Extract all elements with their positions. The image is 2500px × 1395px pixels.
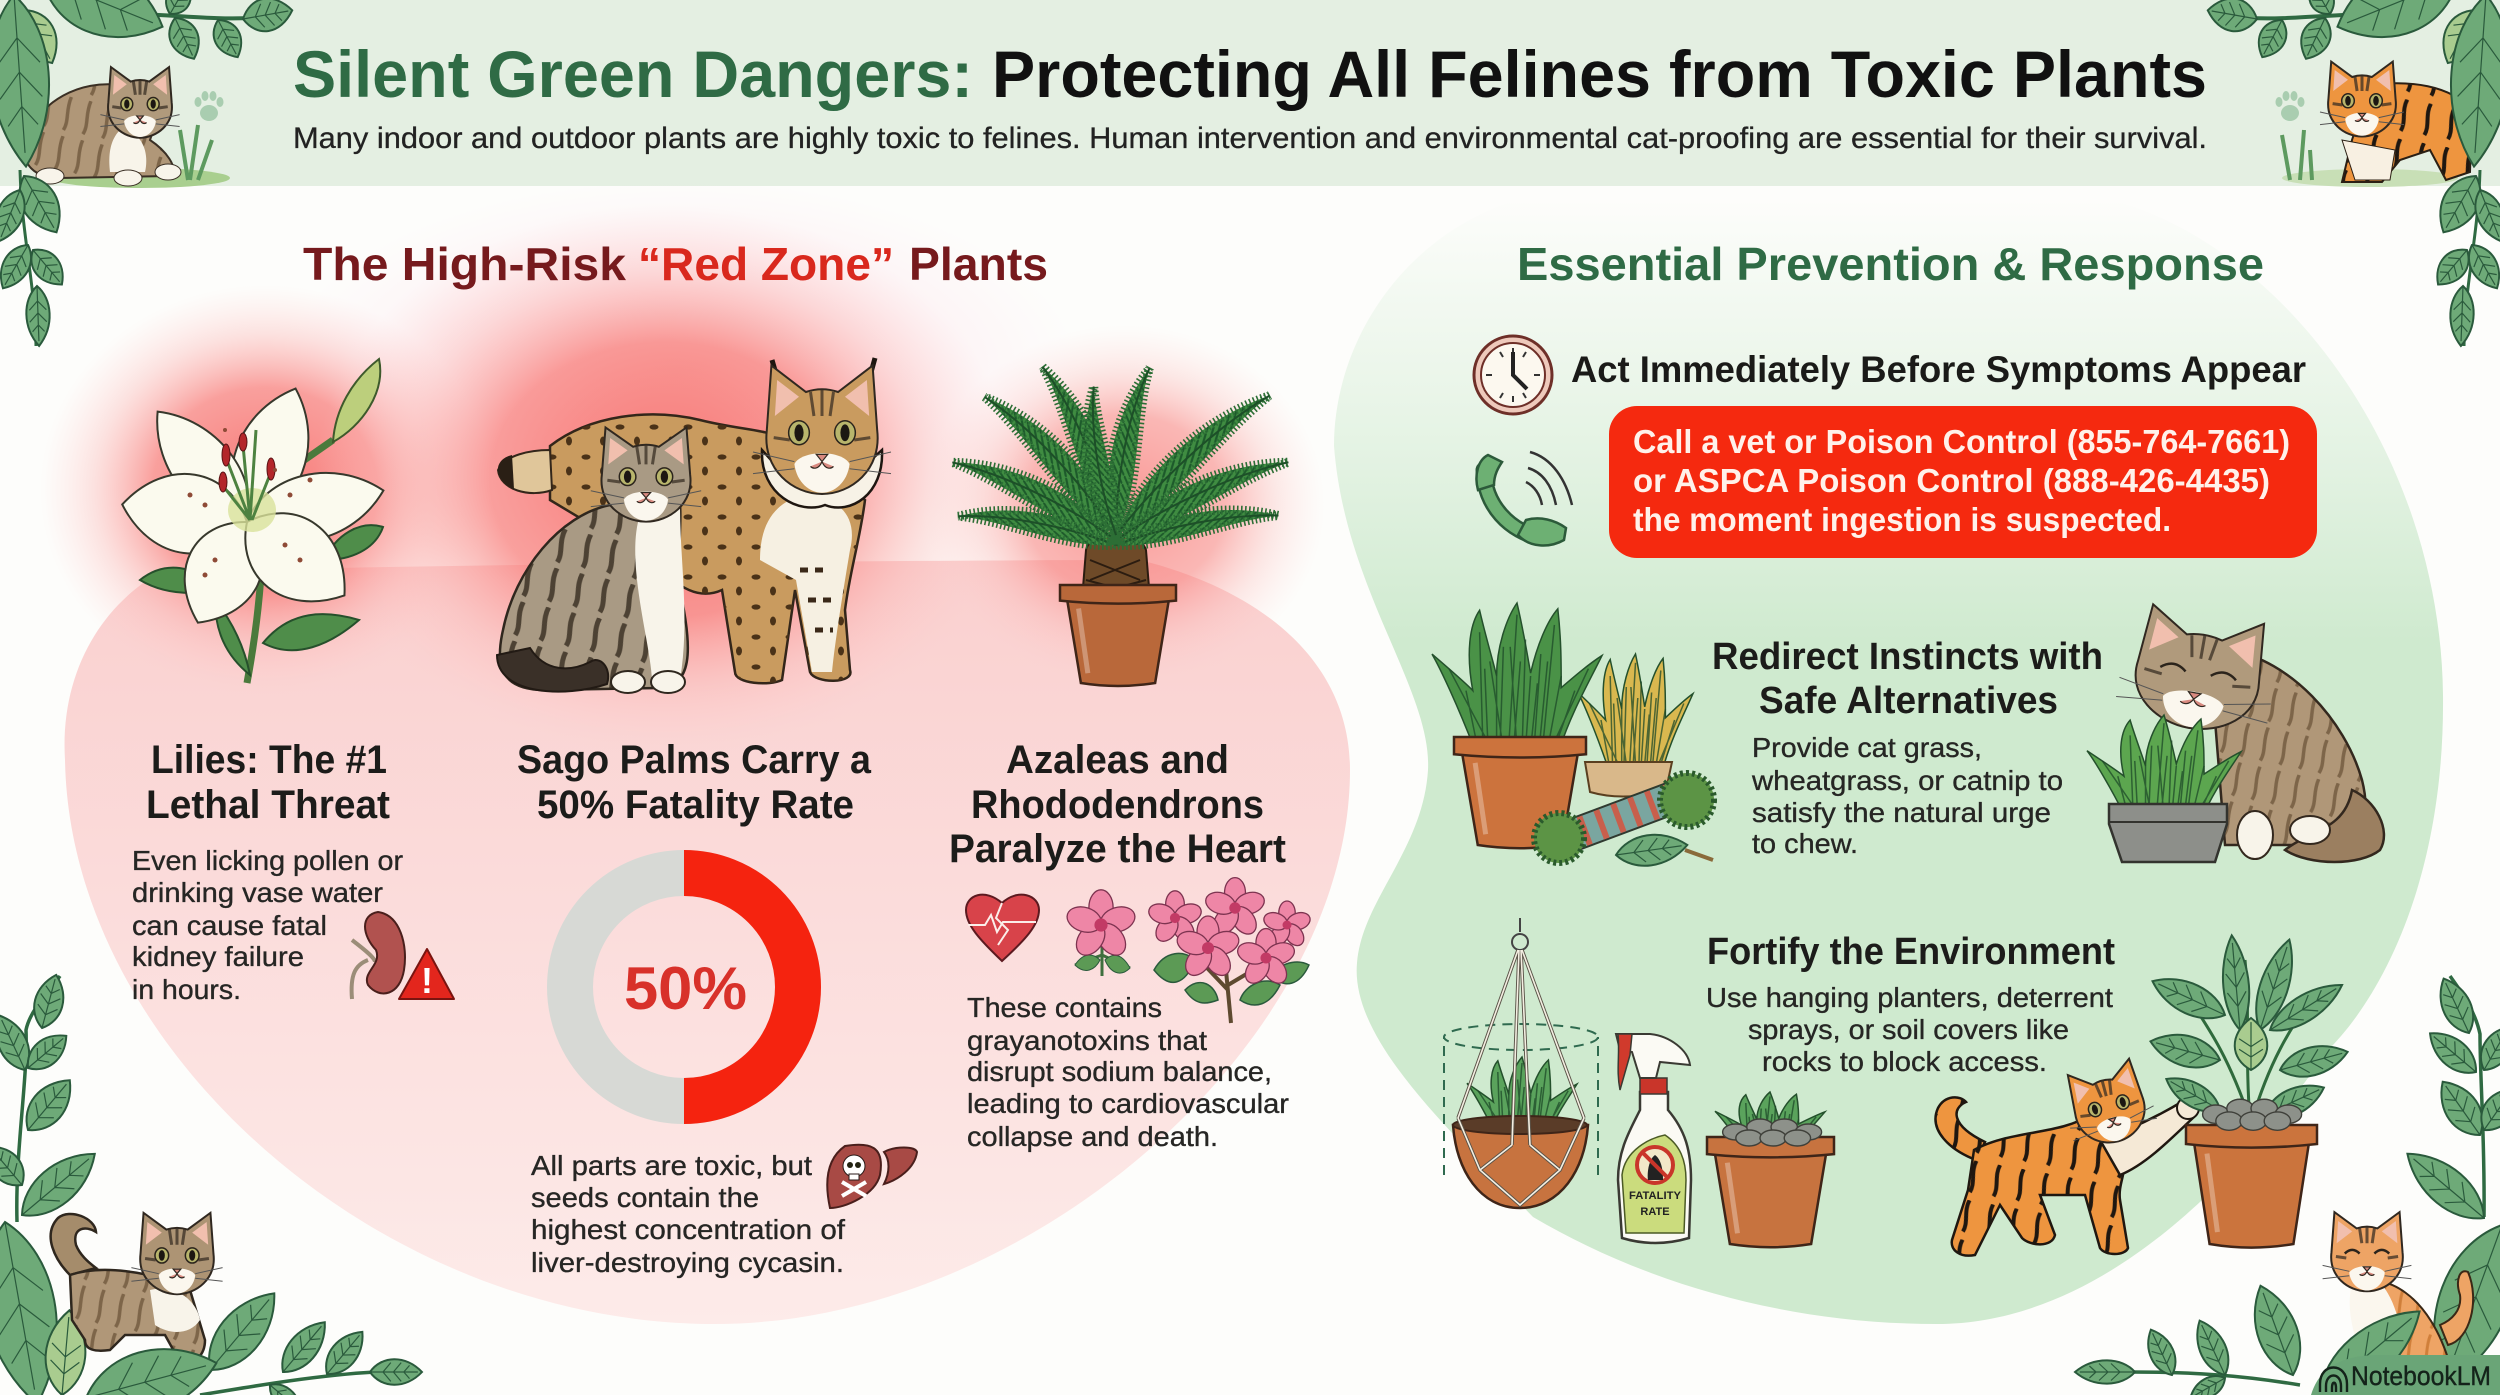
text: redirect: Provide cat grass, [1752, 732, 1982, 763]
icon: warning [399, 949, 454, 1001]
icon: phone [1476, 452, 1572, 545]
foliage: bottom left [0, 971, 422, 1395]
text: sago: liver-destroying cycasin. [531, 1247, 844, 1278]
donut chart: 50 percent [570, 873, 798, 1101]
callout: poison control [1609, 406, 2317, 558]
header band [0, 0, 2500, 186]
foliage: top right [2205, 0, 2500, 346]
heading: red zone: Plants [909, 238, 1048, 290]
callout: poison control: Call a vet or Poison Control (855-764-7661) [1633, 423, 2290, 460]
icon: clock [1474, 336, 1552, 414]
heading: fortify: Fortify the Environment [1707, 931, 2115, 973]
text: lilies: drinking vase water [132, 877, 383, 908]
pink blob [65, 560, 1350, 1324]
text: fortify [1706, 982, 2113, 1077]
icon: broken heart [966, 895, 1039, 961]
callout: poison control: the moment ingestion is suspected. [1633, 501, 2171, 538]
text: azaleas: disrupt sodium balance, [967, 1056, 1272, 1087]
card: azaleas [949, 738, 1312, 1152]
callout: poison control: or ASPCA Poison Control (888-426-4435) [1633, 462, 2270, 499]
illustration: bobcat [498, 358, 891, 683]
illustration: kitten bottom left [51, 1213, 224, 1395]
heading: azaleas: Paralyze the Heart [949, 827, 1286, 871]
foliage: bottom right [2075, 973, 2500, 1395]
text: sago: seeds contain the [531, 1182, 759, 1213]
illustration: tabby cat top left [24, 67, 230, 188]
heading: sago: 50% Fatality Rate [537, 783, 854, 827]
heading: lilies: Lethal Threat [146, 783, 390, 827]
illustration: sago palm [948, 360, 1293, 686]
heading: azaleas: Rhododendrons [971, 783, 1264, 827]
text: sago [531, 1150, 845, 1278]
panel: red zone background [40, 180, 1350, 1324]
heading: redirect: Redirect Instincts with [1712, 636, 2103, 678]
text: azaleas: These contains [967, 992, 1162, 1023]
pale glow behind red zone heading [280, 180, 1080, 560]
donut chart: 50 percent: 50% [624, 955, 747, 1022]
icon: azalea flower [1064, 890, 1138, 976]
card: lilies [132, 738, 454, 1005]
subtitle: Many indoor and outdoor plants are highly toxic to felines. Human intervention and environmental cat-proofing are essential for their survival. [293, 122, 2207, 155]
heading: azaleas: Azaleas and [1006, 738, 1229, 782]
section: redirect instincts [1432, 601, 2384, 870]
illustration: cat eating grass [2087, 601, 2384, 862]
heading: redirect [1712, 636, 2103, 722]
illustration: deterrent spray bottle: RATE [1640, 1206, 1670, 1218]
text: lilies: in hours. [132, 974, 241, 1005]
watermark: NotebookLM [2311, 1355, 2500, 1395]
heading: lilies: Lilies: The #1 [151, 738, 387, 782]
heading: red zone: “Red Zone” [638, 238, 894, 290]
text: azaleas [967, 992, 1289, 1152]
illustration: deterrent spray bottle [1616, 1034, 1691, 1243]
heading: red zone [303, 238, 1048, 290]
text: azaleas: collapse and death. [967, 1121, 1218, 1152]
text: lilies: can cause fatal [132, 910, 327, 941]
glow: lily [40, 285, 490, 695]
text: lilies: kidney failure [132, 941, 304, 972]
card: sago palms [517, 738, 917, 1278]
text: fortify: rocks to block access. [1762, 1046, 2047, 1077]
heading: redirect: Safe Alternatives [1759, 680, 2058, 722]
illustration: lily [117, 359, 391, 683]
illustration: deterrent spray bottle: FATALITY [1629, 1190, 1682, 1202]
illustration: tiger cub pawing [1936, 1056, 2199, 1256]
title: Protecting All Felines from Toxic Plants [992, 37, 2207, 111]
section: fortify environment [1444, 918, 2351, 1256]
title: Silent Green Dangers: [293, 37, 973, 111]
illustration: catnip toy [1534, 773, 1714, 870]
text: fortify: sprays, or soil covers like [1748, 1014, 2069, 1045]
illustration: hanging planter [1444, 918, 1598, 1208]
text: redirect: satisfy the natural urge [1752, 797, 2051, 828]
text: lilies [132, 845, 403, 1005]
heading: sago: Sago Palms Carry a [517, 738, 872, 782]
heading: azaleas [949, 738, 1286, 871]
illustration: cat grass pot [1432, 603, 1602, 848]
illustration: orange cat bottom right [2305, 1212, 2473, 1395]
text: sago: highest concentration of [531, 1214, 845, 1245]
heading: lilies [146, 738, 390, 827]
text: redirect: wheatgrass, or catnip to [1751, 765, 2063, 796]
glow: cats [315, 205, 1015, 755]
illustration: tabby cat sitting [497, 427, 701, 693]
icon: liver with skull [827, 1145, 917, 1208]
text: sago: All parts are toxic, but [531, 1150, 812, 1181]
glow: palm [925, 325, 1325, 685]
text: redirect: to chew. [1752, 828, 1858, 859]
illustration: yellow grass pouch [1578, 654, 1693, 797]
heading: red zone: The High-Risk [303, 238, 626, 290]
heading: act immediately: Act Immediately Before Symptoms Appear [1571, 349, 2306, 390]
illustration: tiger cub top right [2276, 62, 2472, 187]
watermark: NotebookLM: NotebookLM [2351, 1361, 2491, 1391]
text: redirect [1751, 732, 2063, 859]
icon: warning: ! [421, 960, 433, 1001]
icon: kidney [352, 912, 405, 999]
foliage: top left [0, 0, 295, 346]
text: fortify: Use hanging planters, deterrent [1706, 982, 2113, 1013]
title [293, 37, 2207, 111]
heading: sago [517, 738, 872, 827]
text: azaleas: grayanotoxins that [967, 1025, 1207, 1056]
illustration: large plant in rock pot [2146, 934, 2351, 1248]
panel: green prevention background [1334, 182, 2443, 1324]
text: azaleas: leading to cardiovascular [967, 1088, 1289, 1119]
icon: azalea bush [1146, 878, 1312, 1023]
heading: prevention: Essential Prevention & Response [1517, 238, 2264, 290]
section: act immediately [1474, 336, 2317, 558]
text: lilies: Even licking pollen or [132, 845, 403, 876]
illustration: pot with rocks [1707, 1092, 1834, 1247]
